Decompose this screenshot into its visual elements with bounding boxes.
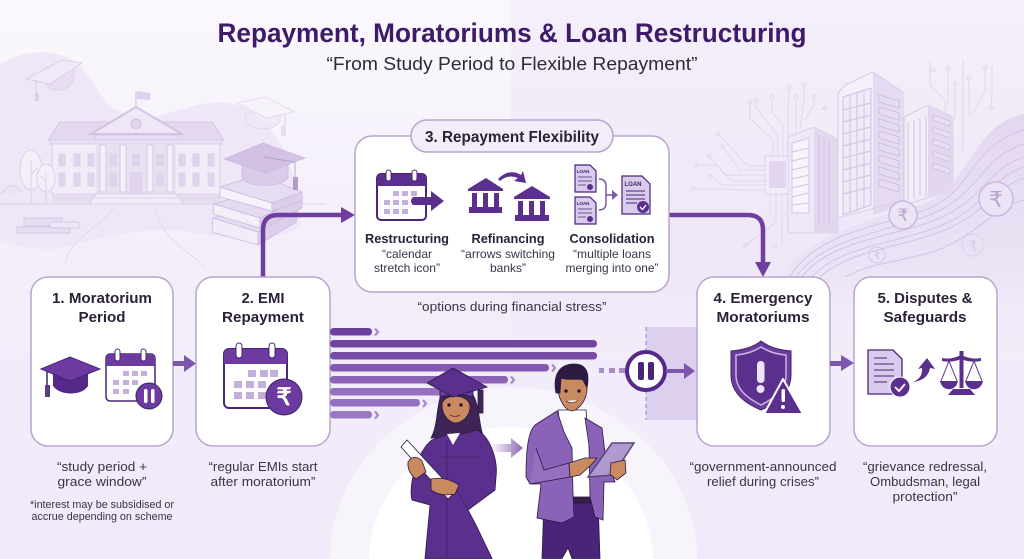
icon: right tower [904, 105, 953, 205]
icon: rupee coins: ₹ [989, 187, 1003, 212]
caption: disputes: protection” [892, 489, 958, 504]
heading: 2. EMI [242, 290, 284, 307]
label: consolidation: Consolidation [570, 231, 655, 246]
label: consolidation: “multiple loans [573, 247, 651, 261]
heading: 1. Moratorium [52, 290, 152, 307]
arrow: 4 to 5 [830, 355, 854, 371]
heading: Safeguards [884, 309, 966, 326]
arrow: EMI repayment up to flexibility [263, 207, 355, 277]
heading: 5. Disputes & [878, 290, 973, 307]
icon: loan documents merging [575, 165, 650, 224]
icon: curved arrow [913, 358, 935, 382]
arrow: flexibility down to emergency moratoriums [669, 215, 771, 277]
icon: left tower [788, 127, 838, 233]
caption: EMI repayment: “regular EMIs start [208, 459, 318, 474]
figure: professional [526, 364, 634, 558]
label: refinancing: “arrows switching [461, 247, 555, 261]
icon: rupee coins: ₹ [898, 206, 908, 225]
title: Repayment, Moratoriums & Loan Restructuring [218, 18, 806, 48]
icon: central tower [838, 72, 903, 218]
icon: calendar with rupee [224, 343, 302, 415]
heading: 4. Emergency [714, 290, 813, 307]
label: consolidation: merging into one” [566, 261, 658, 275]
label: refinancing: Refinancing [472, 231, 545, 246]
panel: 5 disputes and safeguards [854, 277, 997, 446]
footnote: *interest may be subsidised or [30, 499, 174, 511]
icon: floating graduation cap right [237, 97, 294, 136]
background illustration: city, circuits and rupee wave [691, 60, 1024, 300]
wave band [780, 114, 1024, 300]
icon: loan documents merging: LOAN [624, 182, 642, 188]
icon: rupee coins: ₹ [969, 238, 977, 253]
icon: scales of justice [940, 351, 983, 395]
label: refinancing: banks” [490, 261, 526, 275]
label: restructuring [365, 231, 449, 275]
icon: trees [0, 150, 55, 204]
icon: switching banks [468, 171, 550, 221]
panel: 3 repayment flexibility [355, 120, 669, 292]
icon: rupee coins: ₹ [874, 251, 880, 262]
heading: Repayment [222, 309, 304, 326]
icon: university building [48, 91, 224, 204]
icon: grievance document [868, 350, 910, 397]
label: consolidation [566, 231, 658, 275]
caption: EMI repayment: after moratorium” [210, 474, 316, 489]
panel: 1 moratorium period [31, 277, 173, 446]
icon: calendar with rupee: ₹ [276, 384, 292, 411]
icon: stack of small books [17, 218, 80, 233]
icon: chip [765, 156, 789, 194]
background illustration: university campus [0, 60, 325, 268]
arrow: 1 to 2 [173, 355, 196, 372]
icon: floating graduation cap left [26, 60, 82, 101]
label: restructuring: “calendar [382, 247, 432, 261]
pause marker with arrow [599, 327, 697, 420]
icon: graduation cap [41, 357, 100, 397]
heading: Moratoriums [716, 309, 810, 326]
label: refinancing [461, 231, 555, 275]
chart: EMI repayment bars [330, 328, 597, 418]
icon: shield with warning [731, 341, 803, 414]
icon: book stack with graduation cap [212, 143, 305, 245]
icon: calendar with pause [106, 349, 162, 409]
caption: disputes: “grievance redressal, [863, 459, 987, 474]
heading: Period [78, 309, 126, 326]
caption: emergency: relief during crises” [707, 474, 819, 489]
panel: 4 emergency moratoriums [697, 277, 830, 446]
icon: rupee coins [869, 182, 1013, 263]
heading pill: 3. Repayment Flexibility [425, 129, 599, 146]
arrow: graduate to professional [493, 438, 523, 458]
caption: moratorium: “study period + [57, 459, 147, 474]
label: restructuring: Restructuring [365, 231, 449, 246]
panel: 2 EMI repayment [196, 277, 330, 446]
caption: disputes: Ombudsman, legal [870, 474, 980, 489]
caption: flexibility: “options during financial stress” [418, 299, 606, 314]
caption: moratorium: grace window” [58, 474, 146, 489]
figure: graduate [401, 368, 496, 558]
heading pill [411, 120, 613, 152]
icon: loan documents merging: LOAN [577, 169, 589, 174]
circuit lines [691, 60, 993, 248]
label: restructuring: stretch icon” [374, 261, 440, 275]
icon: calendar stretch [377, 170, 444, 220]
caption: emergency: “government-announced [690, 459, 836, 474]
footnote: accrue depending on scheme [32, 511, 172, 523]
subtitle: “From Study Period to Flexible Repayment” [326, 54, 698, 74]
icon: loan documents merging: LOAN [577, 201, 589, 206]
